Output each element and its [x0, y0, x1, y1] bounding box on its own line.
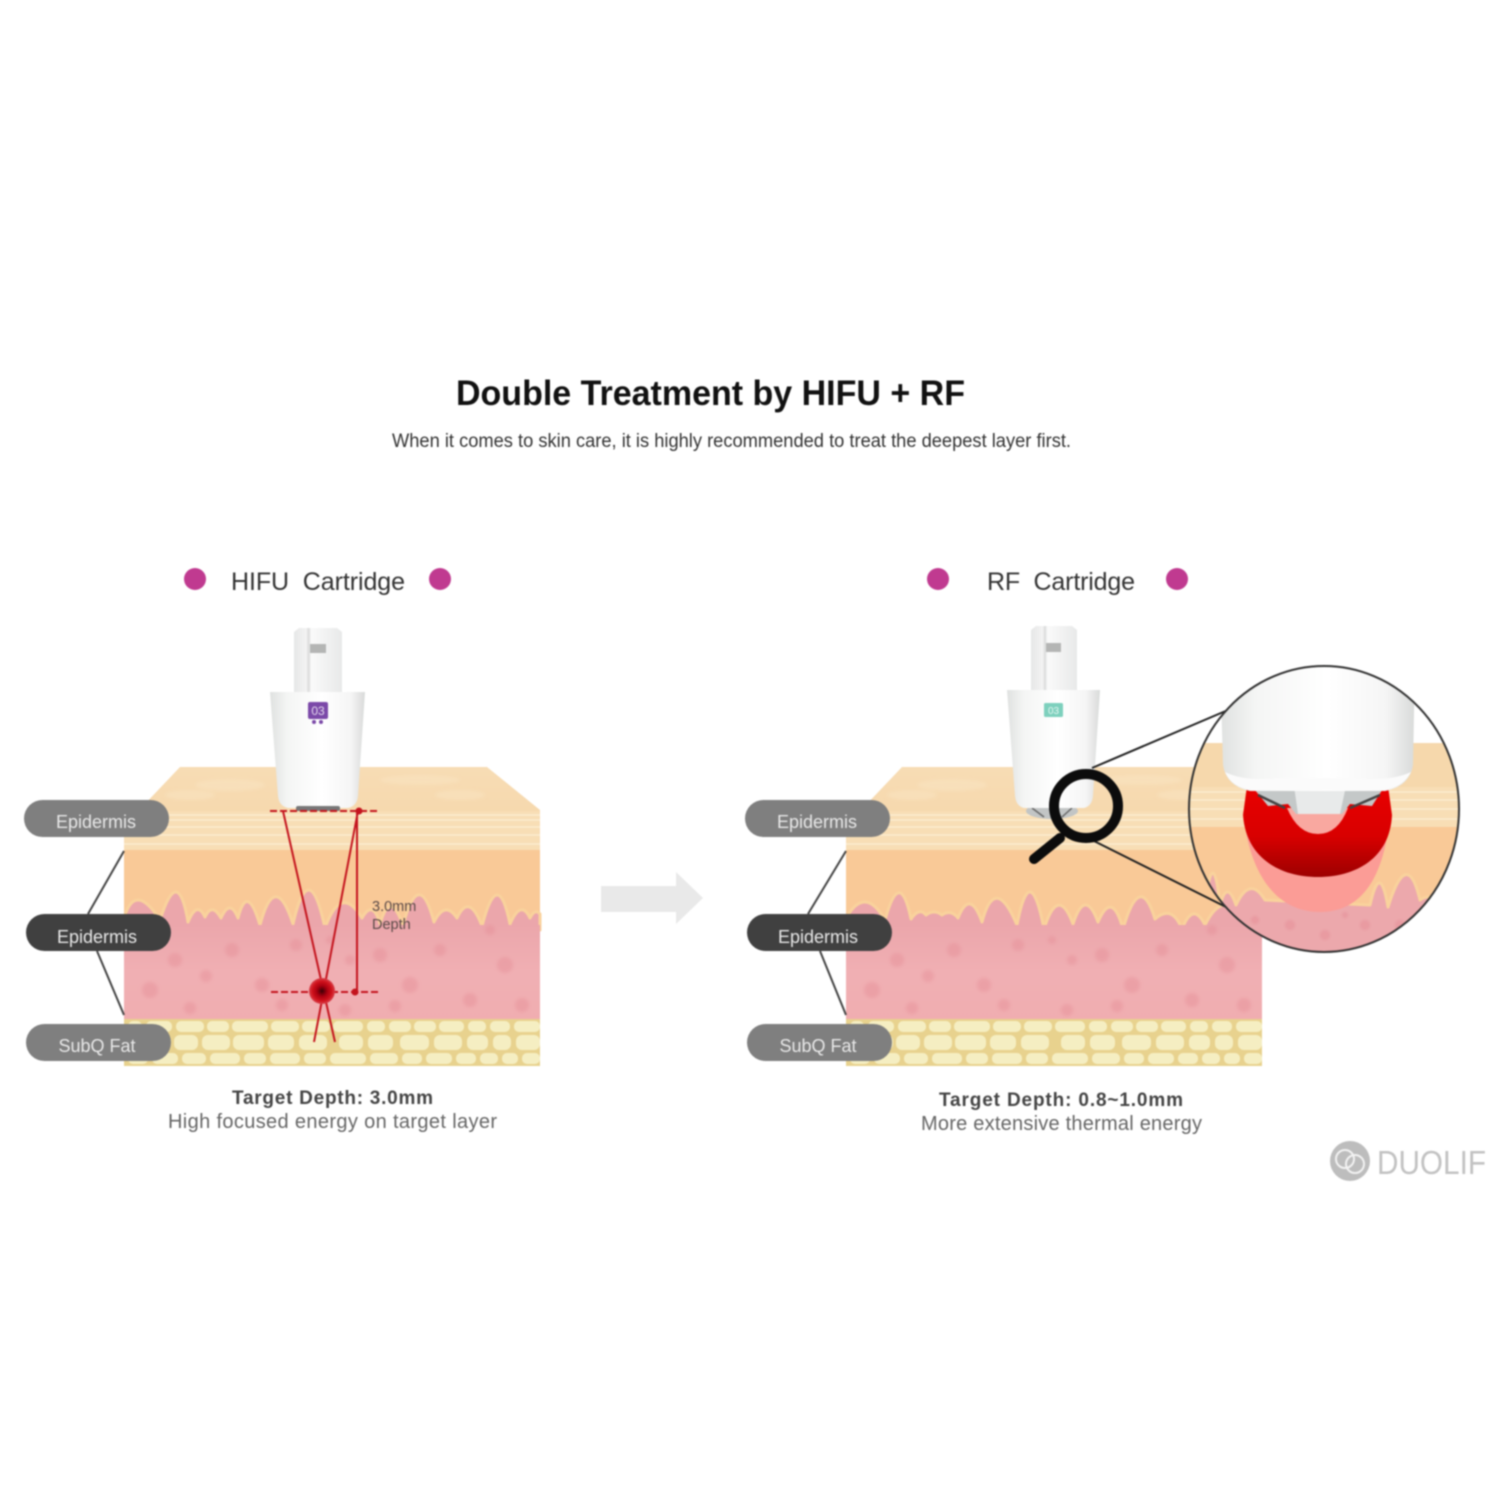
- layer labels: [745, 800, 892, 1061]
- heading: RF Cartridge: RF Cartridge: [987, 568, 1135, 596]
- arrow: [601, 872, 703, 924]
- layer labels: Epidermis: [56, 812, 136, 832]
- heading: RF Cartridge: [927, 568, 1188, 596]
- heading: HIFU Cartridge: [184, 568, 451, 596]
- title: Double Treatment by HIFU + RF: [456, 374, 965, 413]
- device: RF cartridge: 03: [1048, 706, 1059, 717]
- ultrasound beam diagram: [270, 808, 378, 1042]
- caption: [921, 1090, 1202, 1135]
- callout lines: [1092, 710, 1228, 908]
- magnified inset: [1185, 660, 1465, 960]
- heading: HIFU Cartridge: HIFU Cartridge: [231, 568, 405, 596]
- layer labels: Epidermis: [777, 812, 857, 832]
- panel: HIFU cartridge: [24, 568, 540, 1133]
- skin cross-section: [124, 767, 540, 1066]
- device: HIFU cartridge: 03: [311, 704, 325, 718]
- icon: magnifying glass: [1034, 774, 1118, 859]
- panel: RF cartridge: [745, 568, 1465, 1135]
- logo: DUOLIF: DUOLIF: [1377, 1144, 1486, 1181]
- layer labels: Epidermis: [778, 927, 858, 947]
- caption: Target Depth: 0.8~1.0mm: [939, 1090, 1183, 1111]
- caption: Target Depth: 3.0mm: [232, 1088, 433, 1109]
- layer labels: Epidermis: [57, 927, 137, 947]
- caption: More extensive thermal energy: [921, 1113, 1202, 1135]
- device: HIFU cartridge: [270, 628, 365, 811]
- caption: [168, 1088, 497, 1133]
- layer labels: [24, 800, 171, 1061]
- depth label: 3.0mm: [372, 899, 416, 915]
- logo: DUOLIF: [1330, 1141, 1486, 1181]
- skin cross-section: [846, 767, 1262, 1066]
- device: RF cartridge: [1007, 626, 1100, 819]
- depth label: Depth: [372, 917, 411, 933]
- layer labels: SubQ Fat: [58, 1036, 136, 1056]
- layer labels: SubQ Fat: [779, 1036, 857, 1056]
- caption: High focused energy on target layer: [168, 1111, 497, 1133]
- subtitle: When it comes to skin care, it is highly recommended to treat the deepest layer first.: [392, 431, 1071, 452]
